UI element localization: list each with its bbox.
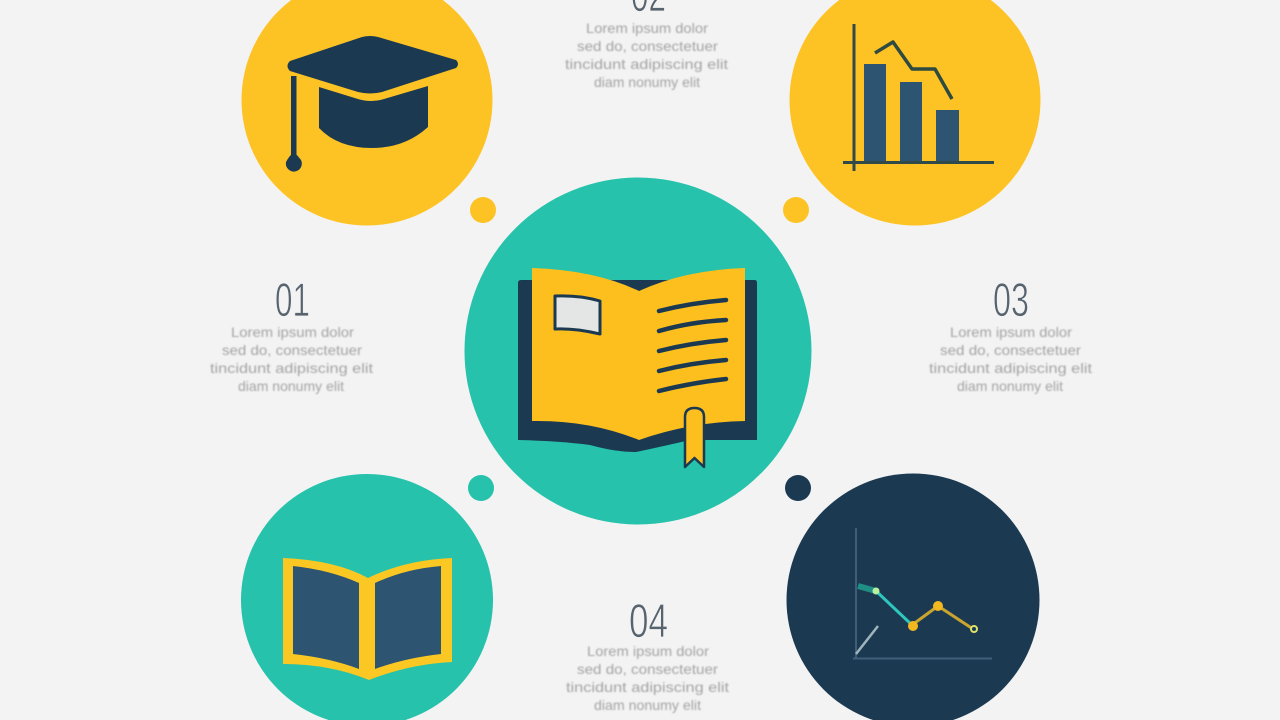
panel: line chart circle <box>786 474 1040 720</box>
text block 04 <box>566 594 729 713</box>
icon: open book <box>518 268 757 467</box>
text block 03: 03 <box>993 273 1029 326</box>
text block 02: tincidunt adipiscing elit <box>565 56 728 72</box>
text block 04: sed do, consectetuer <box>577 661 718 677</box>
text block 02: Lorem ipsum dolor <box>586 20 708 36</box>
connector dot: bottom right <box>785 475 811 501</box>
text block 01 <box>210 273 373 394</box>
text block 04: Lorem ipsum dolor <box>587 643 709 659</box>
icon: small open book <box>283 558 452 680</box>
panel: small book circle <box>241 474 493 720</box>
text block 03 <box>929 273 1092 394</box>
connector dot: bottom left <box>468 475 494 501</box>
text block 01: sed do, consectetuer <box>222 342 362 358</box>
text block 01: tincidunt adipiscing elit <box>210 360 373 376</box>
text block 03: tincidunt adipiscing elit <box>929 360 1092 376</box>
icon: line chart <box>853 528 992 659</box>
text block 02 <box>565 0 728 90</box>
connector dot: top right <box>783 197 809 223</box>
text block 04: tincidunt adipiscing elit <box>566 679 729 695</box>
text block 03: diam nonumy elit <box>957 378 1063 394</box>
panel: graduation cap circle <box>242 0 492 226</box>
panel: bar chart circle <box>790 0 1040 226</box>
text block 04: diam nonumy elit <box>594 697 701 713</box>
text block 01: Lorem ipsum dolor <box>231 324 354 340</box>
text block 02: diam nonumy elit <box>594 74 700 90</box>
text block 03: sed do, consectetuer <box>940 342 1081 358</box>
connector dot: top left <box>470 197 496 223</box>
text block 02: sed do, consectetuer <box>577 38 718 54</box>
text block 01: diam nonumy elit <box>238 378 344 394</box>
panel: open book circle <box>464 178 812 524</box>
text block 01: 01 <box>275 273 310 326</box>
text block 03: Lorem ipsum dolor <box>950 324 1072 340</box>
text block 04: 04 <box>629 594 668 647</box>
icon: bar chart with trend line <box>843 24 994 171</box>
icon: graduation cap <box>286 36 458 172</box>
